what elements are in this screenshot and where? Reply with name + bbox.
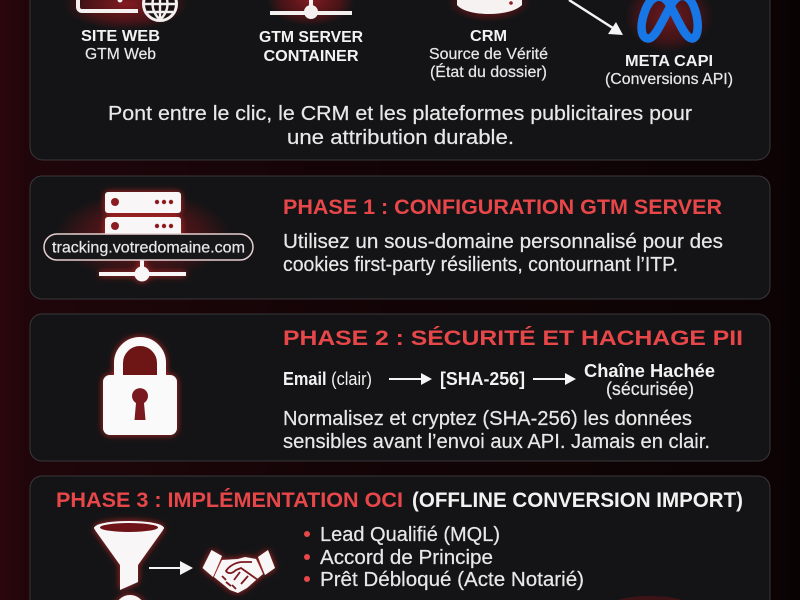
icon: handshake bbox=[202, 550, 275, 593]
panel: phase 2 bbox=[30, 314, 770, 461]
label: crm: Source de Vérité bbox=[429, 46, 548, 63]
panel: architecture overview bbox=[30, 0, 770, 160]
heading: phase 2: PHASE 2 : SÉCURITÉ ET HACHAGE PII bbox=[283, 325, 743, 350]
text: phase 2 body bbox=[283, 408, 710, 453]
text: summary bbox=[108, 103, 692, 149]
icon: meta logo bbox=[625, 0, 713, 52]
heading: phase 1: PHASE 1 : CONFIGURATION GTM SERVER bbox=[283, 195, 722, 219]
icon: crm database bbox=[447, 0, 531, 22]
label: gtm server container: CONTAINER bbox=[264, 48, 359, 65]
list: conversion events: Accord de Principe bbox=[320, 547, 493, 569]
list: conversion events: Prêt Débloqué (Acte Notarié) bbox=[320, 569, 584, 591]
label: gtm server container: GTM SERVER bbox=[259, 29, 363, 46]
panel: phase 1 bbox=[30, 176, 770, 299]
diagram: hashing flow: [SHA-256] bbox=[440, 369, 525, 389]
icon: site web bbox=[64, 0, 188, 30]
diagram: hashing flow: Chaîne Hachée bbox=[584, 361, 715, 381]
label: crm: CRM bbox=[470, 28, 507, 45]
text: summary: une attribution durable. bbox=[287, 127, 514, 149]
arrow: funnel to handshake bbox=[149, 561, 193, 575]
icon: padlock bbox=[103, 342, 177, 435]
label: gtm server container bbox=[259, 29, 363, 65]
diagram: hashing flow: (sécurisée) bbox=[606, 379, 694, 399]
text: phase 2 body: Normalisez et cryptez (SHA-256) les données bbox=[283, 408, 692, 430]
text: summary: Pont entre le clic, le CRM et les plateformes publicitaires pour bbox=[108, 103, 692, 125]
heading: phase 3: (OFFLINE CONVERSION IMPORT) bbox=[412, 488, 743, 512]
text: phase 2 body: sensibles avant l’envoi aux API. Jamais en clair. bbox=[283, 431, 710, 453]
list: conversion events bbox=[304, 524, 584, 591]
label: site web: GTM Web bbox=[85, 46, 156, 63]
icon: gtm server bbox=[267, 0, 355, 26]
label: site web bbox=[81, 28, 160, 63]
text: phase 1 body: cookies first-party résilients, contournant l’ITP. bbox=[283, 254, 678, 276]
diagram: hashing flow: Email (clair) bbox=[283, 369, 372, 389]
text: phase 1 body: Utilisez un sous-domaine personnalisé pour des bbox=[283, 231, 723, 253]
label: meta capi: (Conversions API) bbox=[605, 71, 733, 88]
label: crm: (État du dossier) bbox=[430, 64, 547, 81]
decorative glow bbox=[610, 596, 690, 600]
list: conversion events: Lead Qualifié (MQL) bbox=[320, 524, 500, 546]
domain pill bbox=[44, 234, 253, 260]
text: phase 1 body bbox=[283, 231, 723, 276]
icon: funnel bbox=[94, 521, 164, 600]
label: meta capi: META CAPI bbox=[625, 53, 713, 70]
label: crm bbox=[429, 28, 548, 81]
domain pill: tracking.votredomaine.com bbox=[52, 240, 245, 256]
heading: phase 3 bbox=[56, 487, 743, 512]
heading: phase 3: PHASE 3 : IMPLÉMENTATION OCI bbox=[56, 487, 403, 512]
label: site web: SITE WEB bbox=[81, 28, 160, 45]
panel: phase 3 bbox=[30, 476, 770, 600]
diagram: hashing flow bbox=[283, 361, 715, 399]
icon: server with domain bbox=[44, 192, 253, 282]
label: meta capi bbox=[605, 53, 733, 88]
arrow: crm to meta bbox=[569, 0, 623, 35]
